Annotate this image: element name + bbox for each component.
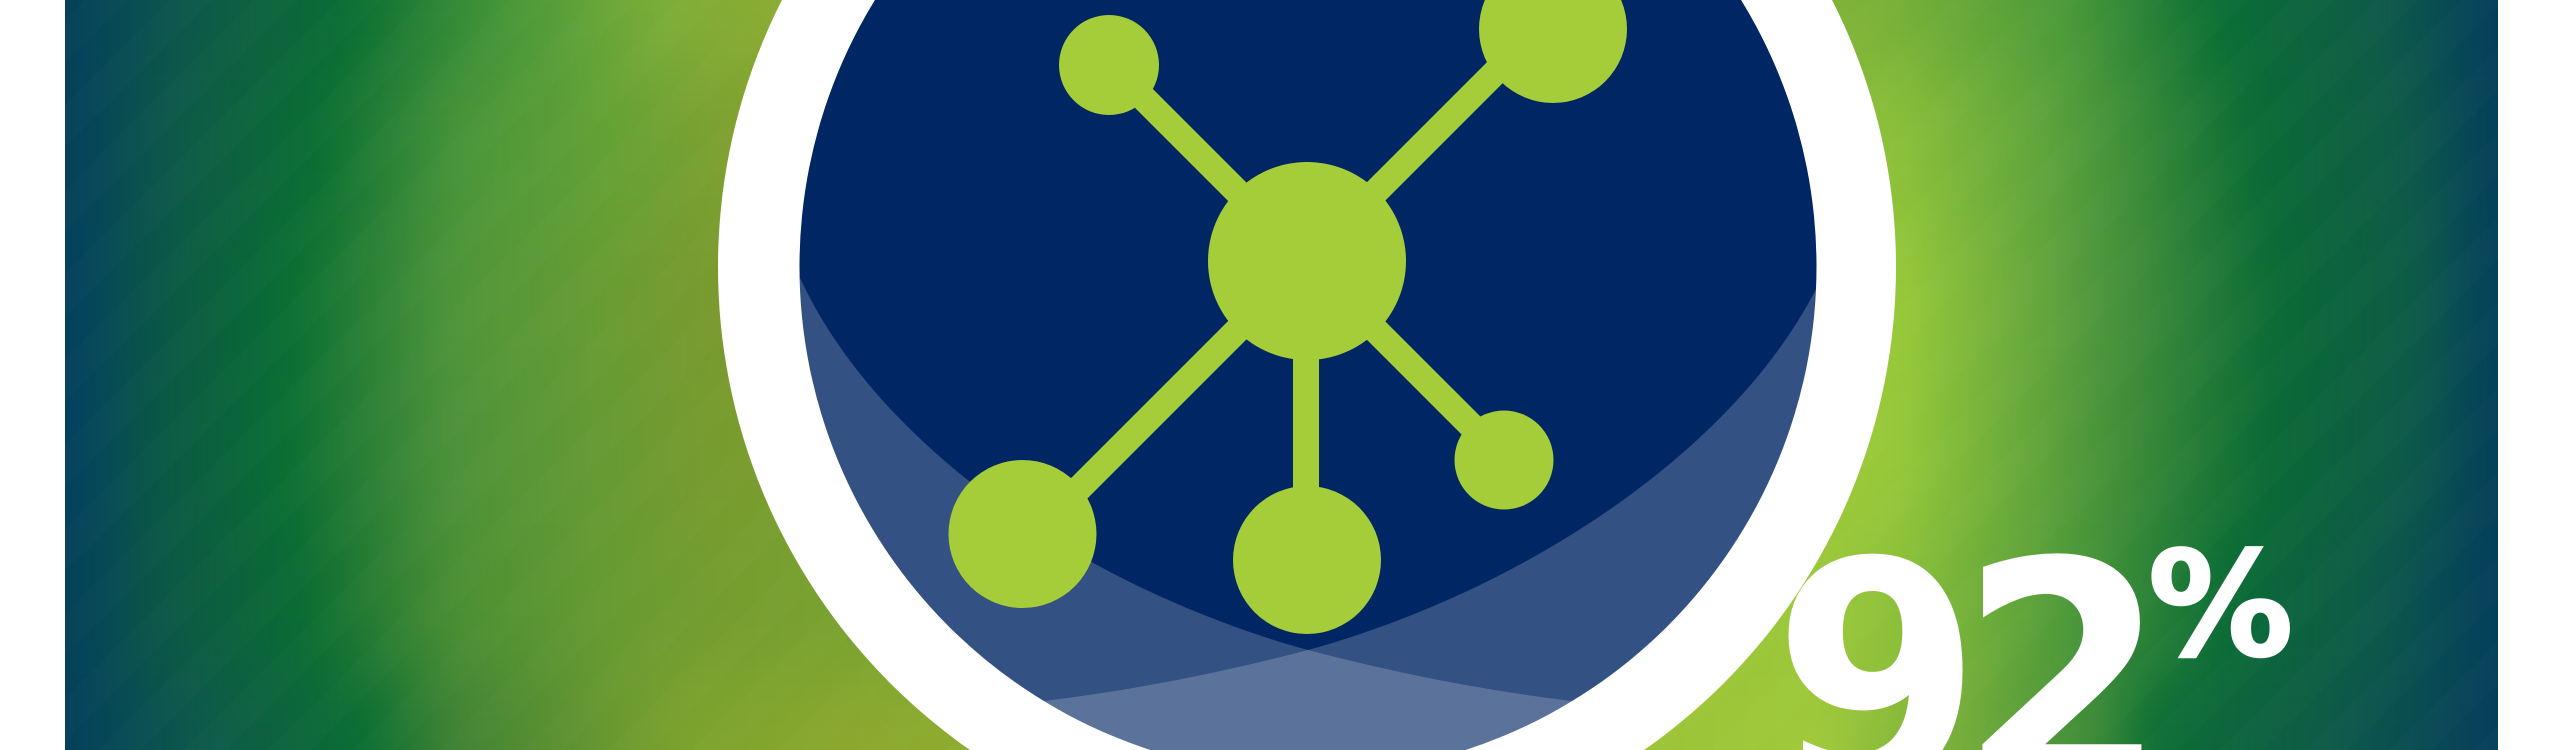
heading: 92 percent statistic — [1788, 546, 2290, 750]
white ring around the disc — [718, 0, 1896, 750]
panel: navy disc with translucent arcs — [780, 0, 1830, 750]
heading: 92 percent statistic: % — [2148, 521, 2293, 690]
icon: molecule network — [948, 0, 1627, 634]
